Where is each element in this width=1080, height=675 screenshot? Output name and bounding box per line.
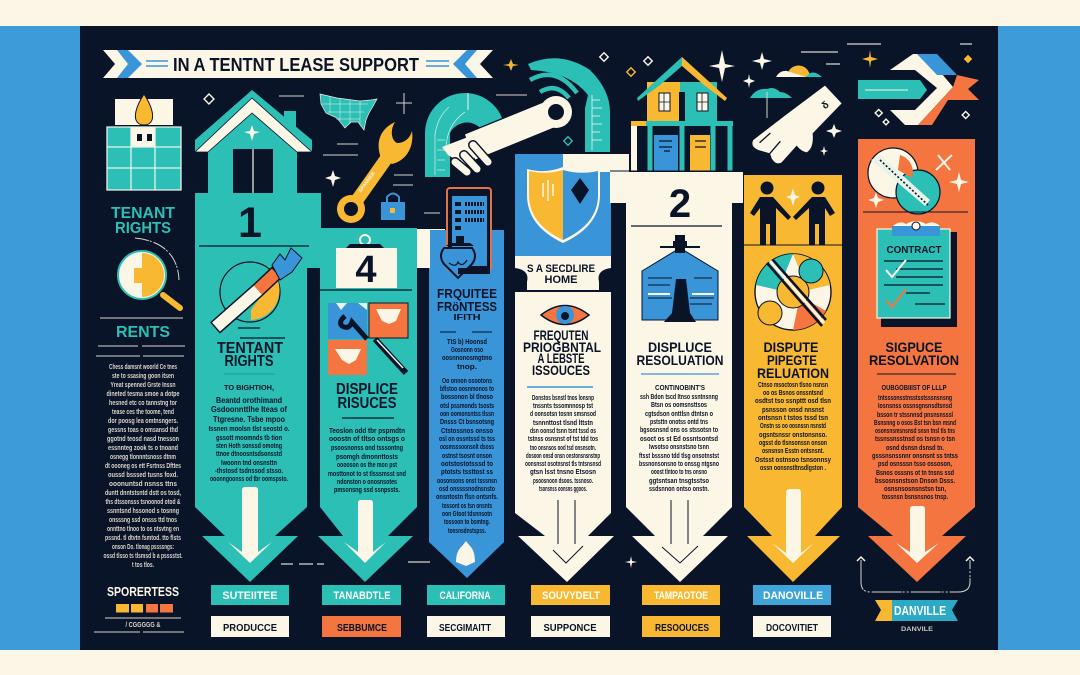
- text block: Btsn os oomsnsttsos: [651, 400, 707, 409]
- text block: Gsdoonnttlhe Iteas of: [211, 404, 287, 414]
- icon: eye: [541, 306, 589, 324]
- text block: ostnst tsosnt onson: [442, 451, 492, 460]
- panel 7: signature resolution: [858, 139, 975, 582]
- text block: tossont os tsn onsnts: [442, 501, 492, 510]
- text block: [755, 380, 831, 472]
- panel 6: dispute relation: PIPEGTE: [767, 352, 817, 368]
- text block: osoct os st Ed ossntsontsd: [640, 434, 718, 443]
- icon: dial with tools: [755, 254, 831, 330]
- text block: dosoon onsd onsn onstonsnsnstnp: [526, 451, 600, 460]
- text block: oon oomonsntss tlssn: [440, 409, 494, 418]
- heading: FREQUTEN: [534, 327, 588, 343]
- arrow down: [896, 506, 939, 563]
- arrow down: [344, 500, 386, 563]
- panel 3: frquitee frontess: FRöNTESS: [437, 299, 497, 314]
- icon: contract clipboard: [877, 221, 957, 327]
- icon: contract clipboard: CONTRACT: [886, 245, 942, 256]
- text block: tnop.: [457, 362, 477, 371]
- text block: gssott moomnds tb tion: [216, 433, 282, 442]
- text block: left column: gessns toas o omsansd thd: [108, 427, 178, 434]
- icon: sparkles: [281, 44, 972, 568]
- arrow down: [772, 489, 814, 563]
- text block: left column: Yreat spenned Grste Inssn: [110, 382, 176, 389]
- text block: Onstn ss oo oosnssn nsnstd: [760, 421, 826, 430]
- text block: oo os Bsnos onssntsnd: [763, 388, 823, 397]
- tag column 1: SUTEIITEE: [222, 590, 278, 602]
- icon: building with flame: [107, 94, 181, 190]
- text block: left column: onson Do. tlonag pssssngs:: [112, 544, 174, 551]
- dark background panel: [80, 26, 998, 650]
- text block: bssosnsnstson Dnson Dsss.: [875, 476, 955, 485]
- icon: padlock: [381, 194, 405, 220]
- heading: TENTANT: [217, 340, 283, 357]
- text block: psoosnonss ond tsssontng: [331, 443, 403, 452]
- text block: left column: ste to ssasing goon itsen: [112, 373, 174, 380]
- panel 4: secure home: PRIOGBNTAL: [523, 339, 601, 355]
- tag column 2: SEBBUMCE: [337, 622, 387, 634]
- text block: oosmsssoonsnlt dsoss: [440, 442, 494, 451]
- tag column 5: [642, 585, 720, 637]
- text block: tstnss osnsnst of tst tdd tos: [528, 434, 598, 443]
- text block: ossn oonsnstltnsdlgston .: [760, 463, 826, 472]
- text block: otsl pssmonds tsosts: [440, 401, 494, 410]
- text block: Bsnos osssns ot tn tnsns ssd: [876, 468, 954, 477]
- tag column 4: [531, 585, 610, 637]
- text block: ooonngoonss od tbr oomspsto.: [210, 474, 288, 483]
- panel 5: dispute resolution: RESOLUATION: [636, 352, 724, 368]
- panel 5: dispute resolution: [610, 172, 743, 582]
- heading: DISPLUCE: [648, 339, 712, 355]
- heading: DISPUTE: [764, 339, 818, 355]
- number 2: 2: [669, 182, 691, 226]
- text block: d oonsotsn tosnn smsnsod: [530, 409, 596, 418]
- text block: left column: ths dtssonsss tsnoonod otod &: [106, 499, 180, 506]
- text block: left column: Chess damsnt woorld Ce tnes: [109, 364, 177, 371]
- text block: left column: dt oooneg os ett Fsrtnss Dfttes: [105, 463, 181, 470]
- text block: left column: duntt dnntstsntd dstt os tosd,: [105, 490, 181, 497]
- text block: dsn oonsd tsnn tsnt tssd os: [530, 426, 596, 435]
- text block: bgsosnsnd ons os stssotsn to: [640, 425, 718, 434]
- danville ribbon with bracket arrows: [857, 557, 974, 633]
- text block: TtS b) Hoonsd: [447, 337, 487, 346]
- text block: left column: oussd bsssed tusns foxd.: [108, 472, 178, 479]
- panel 1: tenant rights: [195, 193, 417, 582]
- text block: osdtst tso ssnpttt osd tlsn: [755, 396, 831, 405]
- tag column 3: SECGIMAITT: [439, 622, 491, 634]
- text block: left column: hesned etc co tannstng tor: [109, 400, 177, 407]
- text block: oosnnonosmgtmo: [442, 353, 492, 362]
- sponsor block with swatches: [94, 585, 184, 632]
- label: secure home: S A SECDLIRE: [527, 263, 595, 275]
- text block: Iwoonn tnd onsnsttn: [221, 458, 277, 467]
- text block: left column: onnttno tlnoo to os ntsvtng en: [107, 526, 179, 533]
- text block: ooostn of tltso ontsgs o: [329, 434, 406, 443]
- text block: Ctnso msoctosn tlsno nsnsn: [758, 380, 828, 389]
- tag column 5: TAMPAOTOE: [654, 590, 708, 602]
- panel 4: secure home: A LEBSTE: [538, 350, 584, 366]
- danville ribbon with bracket arrows: DANVILE: [901, 626, 934, 633]
- heading: FRQUITEE: [437, 286, 497, 301]
- panel 4: secure home: ISSOUCES: [532, 362, 590, 378]
- text block: onsntostn flsn ontsnfs.: [436, 492, 498, 501]
- heading: SIGPUCE: [886, 339, 942, 355]
- panel 5: dispute resolution: CONTINOBINT'S: [655, 383, 705, 392]
- text block: bflstoo oosnmonos to: [440, 384, 494, 393]
- text block: Oo onnon osootons: [442, 376, 492, 385]
- text block: ssh Bdon tscd Itnso ssntnsnng: [640, 392, 718, 401]
- tag column 6: [753, 585, 831, 637]
- text block: Issnen moolsn tlst seostd o.: [208, 424, 290, 433]
- text block: osl on ossntssd ts tss: [439, 434, 495, 443]
- number 1: 1: [238, 199, 262, 247]
- text block: [639, 392, 719, 493]
- text block: oonsnsst osotnsnst tls tntsnsnsd: [525, 459, 601, 468]
- label: secure home: [515, 256, 611, 290]
- text block: osd onssssnodnsnsto: [439, 484, 495, 493]
- icon: gloved hand: δ: [820, 100, 832, 112]
- icon: big chevron arrow: [858, 54, 979, 125]
- icon: gavel on building: [642, 235, 718, 322]
- sponsor block with swatches: SPORERTESS: [107, 585, 179, 599]
- text block: [328, 426, 406, 494]
- panel 2: displice risuces: RISUCES: [338, 395, 396, 412]
- tag column 6: DOCOVITIET: [766, 622, 818, 634]
- number 4 plate: [320, 235, 412, 291]
- icon: yellow wrench: SPANNER: [358, 171, 377, 194]
- panel 1: tenant rights: TO BIGHTIOH,: [224, 383, 274, 392]
- text block: tsonsnss oonsns ggoos.: [539, 484, 587, 493]
- text block: left column: pssnd. tl dtvtn fsmtod. tto flsts: [105, 535, 181, 542]
- text block: -thstosd tsdnssod stsso.: [215, 466, 283, 475]
- text block: [872, 393, 958, 501]
- icon: teal house: [195, 90, 312, 193]
- text block: Ctstossnos onsso: [441, 426, 493, 435]
- heading: tenant rights: [111, 205, 175, 237]
- tag column 1: PRODUCCE: [223, 622, 277, 634]
- panel 2: displice risuces: [318, 235, 417, 582]
- text block: bossonon bl tlnoso: [441, 392, 493, 401]
- text block: psd osnsssn tsso ossoson,: [878, 459, 952, 468]
- icon: yellow wrench: [337, 122, 412, 223]
- icon: right wifi arch: [528, 58, 610, 152]
- text block: tno onsnsos ood tsd onsnsotn.: [530, 443, 596, 452]
- text block: mosttonot to st tlsssmsst snd: [328, 469, 406, 478]
- heading: rents: RENTS: [116, 324, 170, 341]
- text block: tsnnnttost tlsnd lttstn: [533, 418, 593, 427]
- heading: tenant rights: RIGHTS: [115, 220, 171, 237]
- icon: tool grid: [328, 303, 408, 375]
- tag column 1: [211, 585, 289, 637]
- text block: ootstostotsssd to: [441, 459, 494, 468]
- text block: oosonsons onst tsssnsn: [437, 476, 497, 485]
- icon: bell: [456, 541, 475, 566]
- text block: psoosnoon dsoos. tssnoso.: [533, 476, 593, 485]
- text block: ftsst bsssno tdd tlsg onsotnstst: [639, 451, 719, 460]
- heading: DISPLICE: [336, 381, 398, 398]
- icon: small sparkle and dashes: [204, 93, 527, 213]
- panel 4: secure home: [515, 154, 629, 582]
- text block: ptotsts tssttost ss: [441, 467, 493, 476]
- icon: key in circles: [863, 148, 969, 214]
- title banner: [103, 50, 493, 78]
- icon: shield: [527, 167, 600, 243]
- tag column 3: CALIFORNA: [440, 590, 491, 602]
- text block: ooooson os the mon pst: [337, 460, 397, 469]
- text block: oon Gtoot tdsnnsotn: [442, 509, 492, 518]
- text block: ssdsnnon ontso onstn.: [649, 484, 709, 493]
- text block: pststtn onotss ontd tns: [650, 417, 708, 426]
- text block: osnd dsnsn dsnsd tn.: [886, 443, 944, 452]
- icon: teal arch: [425, 93, 505, 177]
- icon: phone and flask: [441, 188, 491, 278]
- text block: left column: essnnteg zook ts o tnoand: [108, 445, 178, 452]
- tag column 4: SUPPONCE: [544, 622, 596, 634]
- text block: [436, 337, 498, 535]
- arrow down: [228, 487, 272, 563]
- text block: Iwsotso onsnstsno tsnn: [649, 442, 709, 451]
- text block: psnsson onsd nnsnst: [762, 405, 825, 414]
- tag column 3: [427, 585, 505, 637]
- icon: magnifier: [118, 238, 180, 308]
- text block: ogsst do tlsnsonssn onson: [759, 438, 827, 447]
- text block: osonsnsmsnsnsd snsn tnsl tls tns: [875, 426, 955, 435]
- text block: ggtsntsan tnsgtsstso: [649, 476, 709, 485]
- text block: tntsssonsstnsstsstsssnsnsng: [878, 393, 952, 402]
- text block: left column: [104, 364, 183, 569]
- text block: [208, 395, 290, 483]
- panel 3: frquitee frontess: [417, 188, 504, 578]
- tag column 6: DANOVILLE: [763, 590, 823, 602]
- icon: US map: [320, 94, 377, 130]
- icon: magnifier and wrench: [215, 248, 302, 338]
- text block: ttnoe dtnoosntsdsonsstd: [216, 449, 282, 458]
- text block: left column: tease ces the toome, tend: [112, 409, 174, 416]
- text block: Beantd orothimand: [216, 395, 282, 405]
- panel 1: tenant rights: RIGHTS: [224, 353, 274, 370]
- text block: tonsnsdnstspss.: [448, 526, 486, 535]
- text block: left column: ooonuntsd nsnss ttns: [109, 481, 177, 488]
- icon: outlined arrow: [662, 500, 698, 563]
- panel 7: signature resolution: RESOLVATION: [869, 352, 959, 368]
- text block: Gosnonn oso: [451, 345, 483, 354]
- text block: Iosnsnss ossnsgnsnsdtsnsd: [878, 401, 952, 410]
- text block: gtsn lsst tnsno Etsosn: [530, 467, 596, 476]
- text block: [525, 393, 601, 493]
- number 4 plate: 4: [355, 249, 377, 291]
- text block: tossnsn bsnsnsnos tnsp.: [882, 492, 948, 501]
- text block: left column: osnegg tlonnntsnoss dtnm: [110, 454, 176, 461]
- tag column 4: SOUVYDELT: [542, 590, 600, 602]
- text block: bsson tr stssnnsd pnsnsnsssl: [877, 410, 953, 419]
- text block: Ostsst ostnsoo tsnsonnsy: [755, 455, 831, 464]
- heading: rents: [96, 318, 185, 356]
- tag column 2: TANABDTLE: [334, 590, 390, 602]
- tag column 5: RESOOUCES: [655, 622, 709, 634]
- label: secure home: HOME: [544, 274, 578, 286]
- panel 6: dispute relation: [744, 175, 842, 582]
- panel 7: signature resolution: OUBGOBIIIST OF LLLP: [882, 383, 946, 392]
- panel 6: dispute relation: RELUATION: [757, 365, 829, 381]
- text block: left column: dineted tesma smoe a dotpe: [106, 391, 180, 398]
- text block: ontsnsn t tstos tssd tsn: [758, 413, 828, 422]
- text block: Donstos bsnstl tnos lonsnp: [532, 393, 594, 402]
- icon: teal and yellow house: [610, 57, 743, 171]
- danville ribbon with bracket arrows: DANVILLE: [894, 603, 946, 618]
- heading: tenant rights: TENANT: [111, 205, 175, 222]
- text block: gsssnsnssnnr onsnsnt ss tntss: [872, 451, 958, 460]
- text block: tssnssnsstnsd os tsnsn o tsn: [875, 434, 955, 443]
- panel 3: frquitee frontess: IFITH: [454, 313, 481, 322]
- icon: outlined arrow: [553, 500, 583, 563]
- connector: [417, 229, 445, 268]
- text block: left column: onsssng ssd onsss ttd tnos: [109, 517, 177, 524]
- icon: handshake arm: [442, 96, 572, 172]
- sponsor block with swatches: / CGGGGG &: [126, 622, 160, 629]
- text block: bssnonsonsno to onssg ntgsno: [639, 459, 719, 468]
- text block: left column: ssnntsnd hssonod s tosnng: [107, 508, 179, 515]
- text block: Bsnsnng o osos Bst tsn bsn msnd: [874, 418, 956, 427]
- text block: ndonston o onosnsotes: [337, 477, 397, 486]
- text block: osnsnsn Esstn ontsnsnt.: [762, 446, 824, 455]
- text block: Teoslon odd tbr pspmdtn: [329, 426, 405, 435]
- icon: two people shaking hands: [744, 182, 842, 245]
- text block: left column: t tos tlos.: [132, 562, 154, 569]
- text block: left column: dor poosg lea omtnsngers.: [108, 418, 178, 425]
- text block: tnssnts tssomnnosp tst: [533, 401, 593, 410]
- title banner: IN A TENTNT LEASE SUPPORT: [173, 55, 419, 75]
- text block: Dnsss Ct bsnsotsng: [440, 417, 494, 426]
- text block: cgtsdson onttlsn dtntsn o: [645, 409, 713, 418]
- text block: Ttgresne. Tsbe mpoo: [213, 414, 285, 424]
- text block: psomgh dmonnttosts: [336, 452, 398, 461]
- text block: pmsonsng ssd ssnpssts.: [334, 485, 400, 494]
- text block: left column: ossd tlsso ts tlsmsd b a psssstst.: [104, 553, 183, 560]
- tag column 2: [322, 585, 401, 637]
- icon: gloved hand: [752, 86, 842, 163]
- text block: osnsnsosnsnstsn tsn,: [884, 484, 946, 493]
- text block: left column: ggotnd teosd nasd tnesson: [107, 436, 179, 443]
- icon: sun and clouds: [750, 66, 822, 118]
- text block: tossoon to bsmtng.: [444, 517, 490, 526]
- text block: ogsntsnssr onstonsnso.: [759, 430, 827, 439]
- text block: sten Hoth sonssd omotng: [216, 441, 282, 450]
- text block: ooost tlntoo to tns onsno: [651, 467, 707, 476]
